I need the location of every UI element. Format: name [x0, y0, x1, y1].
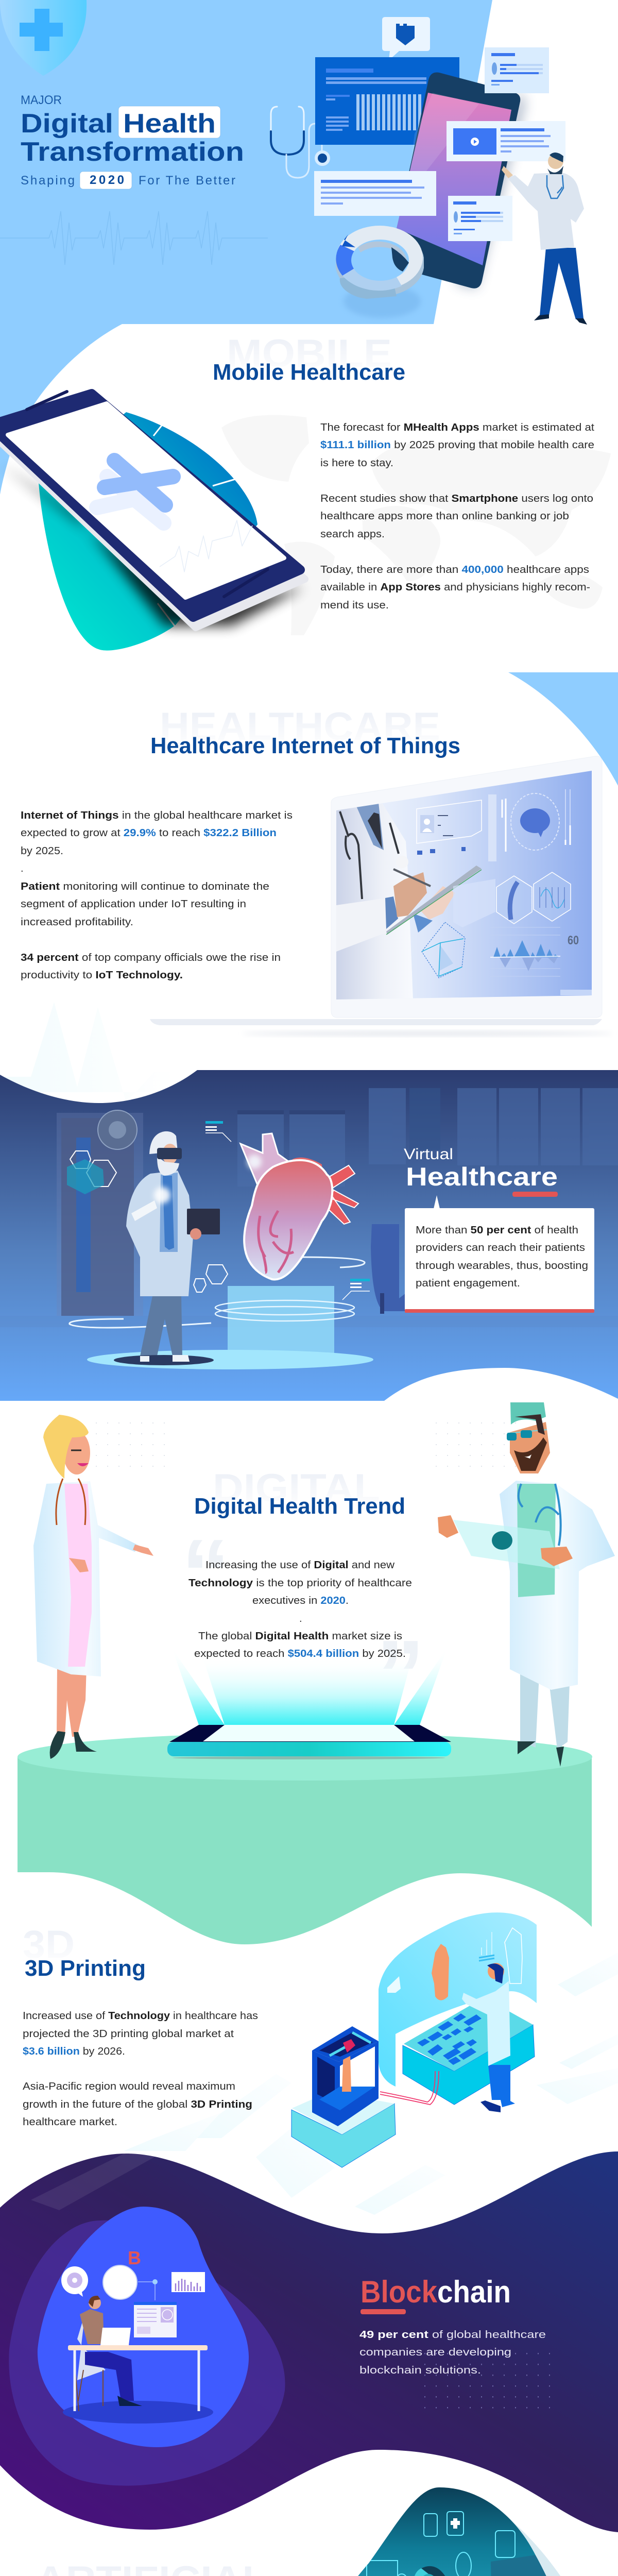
- icon: stethoscope: [271, 107, 329, 178]
- text: digital health body: The global Digital Health market size is: [198, 1631, 402, 1642]
- text: blockchain body: 49 per cent of global healthcare: [359, 2329, 546, 2341]
- ghost heartbeat shape: [0, 1002, 175, 1103]
- callout card: More than 50 per cent of health: [416, 1225, 578, 1236]
- text: mobile healthcare body: available in App Stores and physicians highly recom-: [320, 582, 590, 593]
- room: shelves: [237, 1110, 345, 1187]
- figure: person at desk: [68, 2296, 208, 2411]
- AI blob content: [366, 2511, 546, 2576]
- text: mobile healthcare body: $111.1 billion by 2025 proving that mobile health care: [320, 439, 594, 451]
- text: IoT body: expected to grow at 29.9% to reach $322.2 Billion: [21, 827, 277, 839]
- light beams: [172, 1648, 447, 1725]
- text: mobile healthcare body: healthcare apps more than online banking or job: [320, 511, 569, 522]
- title block: Health: [123, 109, 216, 139]
- heading: Virtual Healthcare: [404, 1146, 558, 1197]
- corner curve and rule: [108, 672, 618, 786]
- icon: medical plus on screen: [97, 461, 173, 523]
- text: 3D printing body: healthcare market.: [23, 2116, 117, 2128]
- title block: For The Better: [139, 174, 235, 188]
- text: blockchain body: blockchain solutions.: [359, 2365, 481, 2376]
- icon: speech bubble with shield: [382, 17, 430, 60]
- icon: shield with plus: [0, 0, 87, 76]
- title block: Transformation: [21, 137, 244, 167]
- heading: Digital Health Trend: Digital Health Trend: [194, 1494, 405, 1519]
- header blue background: [0, 0, 492, 495]
- title block: 2020: [90, 173, 124, 187]
- text: 3D printing body: $3.6 billion by 2026.: [23, 2046, 125, 2057]
- callout card: providers can reach their patients: [416, 1242, 585, 1253]
- text: IoT body: Patient monitoring will continue to dominate the: [21, 881, 269, 892]
- figure: doctor: [502, 152, 587, 325]
- illustration: control table: [403, 1997, 535, 2105]
- text: 3D printing body: projected the 3D printing global market at: [23, 2028, 234, 2040]
- title block: Digital: [21, 109, 113, 139]
- ghost quotation marks: [181, 1519, 425, 1730]
- illustration: holographic heart: [241, 1133, 358, 1279]
- illustration: AI blob: [358, 2487, 560, 2576]
- title block: [21, 93, 244, 189]
- text: mobile healthcare body: Recent studies show that Smartphone users log onto: [320, 493, 593, 504]
- text: 3D printing body: [23, 2010, 258, 2128]
- virtual healthcare background: [0, 1070, 618, 1401]
- heartbeat line: [0, 211, 268, 265]
- text: IoT body: Internet of Things in the global healthcare market is: [21, 810, 293, 821]
- text: mobile healthcare body: Today, there are more than 400,000 healthcare apps: [320, 564, 589, 575]
- illustration: tablet with gradient screen: [391, 73, 525, 289]
- panel: digital health trend: [18, 1402, 615, 1944]
- figure: scientist: [462, 1963, 515, 2112]
- text: blockchain body: [359, 2329, 546, 2376]
- document card: [315, 57, 459, 145]
- panel: artificial intelligence: [43, 2487, 560, 2576]
- tablet: [167, 1725, 451, 1759]
- circles: gear and coin: B: [128, 2247, 141, 2268]
- ghost quotation marks: “: [181, 1519, 230, 1629]
- doctor lab coat: [336, 804, 413, 999]
- ghost word: 3D: 3D: [23, 1923, 75, 1967]
- chair: [371, 1224, 406, 1314]
- panel: 3D printing: [23, 1912, 618, 2215]
- background diagonal stripes: [124, 1953, 618, 2215]
- text: digital health body: Increasing the use of Digital and new: [205, 1560, 395, 1571]
- ghost word: MOBILE: MOBILE: [227, 332, 392, 376]
- text: 3D printing body: growth in the future of the global 3D Printing: [23, 2099, 252, 2110]
- text: IoT body: productivity to IoT Technology.: [21, 970, 183, 981]
- screen UI panels: [453, 879, 495, 927]
- text: 3D printing body: Asia-Pacific region would reveal maximum: [23, 2081, 235, 2092]
- text: IoT body: [21, 810, 293, 981]
- room: door and wall dial: [57, 1110, 143, 1316]
- text: mobile healthcare body: search apps.: [320, 529, 385, 540]
- panel: healthcare internet of things: [0, 672, 618, 1103]
- text: mobile healthcare body: mend its use.: [320, 600, 389, 611]
- text: digital health body: [188, 1560, 412, 1659]
- panel: header: [0, 0, 587, 495]
- floor: [0, 1316, 618, 1327]
- chart card: [171, 2272, 205, 2292]
- illustration: teardrop behind phone: [39, 412, 258, 651]
- text: digital health body: .: [299, 1613, 302, 1624]
- title block: Shaping: [21, 174, 75, 188]
- laptop screen: doctor with clipboard and UI: [336, 789, 592, 999]
- hologram discs and beam: [70, 1257, 373, 1369]
- text: digital health body: executives in 2020.: [252, 1595, 349, 1606]
- laptop screen: doctor with clipboard and UI: 60: [568, 934, 579, 947]
- text: IoT body: increased profitability.: [21, 917, 133, 928]
- text: digital health body: expected to reach $504.4 billion by 2025.: [194, 1648, 406, 1659]
- callout card: [405, 1195, 594, 1313]
- text: digital health body: Technology is the top priority of healthcare: [188, 1578, 412, 1589]
- title block: MAJOR: [21, 93, 62, 107]
- chart: 3D donut ring: [336, 226, 424, 318]
- text: mobile healthcare body: The forecast for MHealth Apps market is estimated at: [320, 422, 594, 433]
- heading: Virtual Healthcare: Healthcare: [406, 1162, 558, 1191]
- card: patient bars: [448, 196, 512, 241]
- panel: virtual healthcare: [0, 1070, 618, 1401]
- room: cabinets: [369, 1088, 618, 1165]
- card: video: [447, 121, 565, 161]
- illustration: hologram panel: [379, 1912, 537, 2087]
- dot grids: [87, 1422, 524, 1476]
- blobs: [9, 2207, 285, 2486]
- heading: Healthcare Internet of Things: Healthcare Internet of Things: [150, 733, 460, 758]
- callout card: patient engagement.: [416, 1278, 520, 1289]
- figure: female doctor: [33, 1415, 153, 1759]
- text: IoT body: by 2025.: [21, 845, 63, 857]
- card: profile bars: [485, 47, 549, 93]
- world map watermark: [221, 415, 611, 635]
- phone shadow: [0, 464, 304, 626]
- text: IoT body: 34 percent of top company officials owe the rise in: [21, 952, 281, 963]
- dot grid: [415, 2344, 554, 2416]
- icon: orange hand: [432, 1944, 449, 2000]
- glare: [31, 2153, 157, 2210]
- callout tags: [205, 1121, 370, 1300]
- text: mobile healthcare body: is here to stay.: [320, 457, 393, 469]
- ghost word: HEALTHCARE: HEALTHCARE: [160, 705, 440, 749]
- figure: male doctor with tablet: [438, 1402, 615, 1767]
- hexagons: [67, 1151, 228, 1292]
- text: 3D printing body: Increased use of Technology in healthcare has: [23, 2010, 258, 2022]
- card: text lines: [314, 171, 436, 216]
- heading: Mobile Healthcare: Mobile Healthcare: [213, 360, 405, 385]
- callout card: through wearables, thus, boosting: [416, 1260, 588, 1272]
- blockchain wave background: [0, 2151, 618, 2532]
- heading: 3D Printing: 3D Printing: [25, 1956, 146, 1981]
- text: mobile healthcare body: [320, 422, 594, 611]
- ghost quotation marks: ”: [376, 1620, 425, 1730]
- heading: Blockchain: Blockchain: [360, 2275, 511, 2309]
- podium: [18, 1733, 592, 1944]
- illustration: laptop: [150, 756, 613, 1036]
- text: IoT body: segment of application under IoT resulting in: [21, 899, 246, 910]
- figure: doctor with VR headset: [114, 1131, 220, 1365]
- heading: Virtual Healthcare: Virtual: [404, 1146, 453, 1163]
- panel: mobile healthcare: [0, 332, 611, 651]
- ghost word: DIGITAL: DIGITAL: [213, 1466, 380, 1510]
- text: blockchain body: companies are developing: [359, 2347, 511, 2358]
- illustration: smartphone: [0, 392, 305, 628]
- browser card: [134, 2302, 177, 2337]
- text: IoT body: .: [21, 863, 24, 874]
- panel: blockchain: [0, 2151, 618, 2532]
- white cap over rule: [0, 674, 618, 1072]
- illustration: 3D printer on pedestal: [291, 2026, 439, 2167]
- circles: gear and coin: [61, 2247, 158, 2300]
